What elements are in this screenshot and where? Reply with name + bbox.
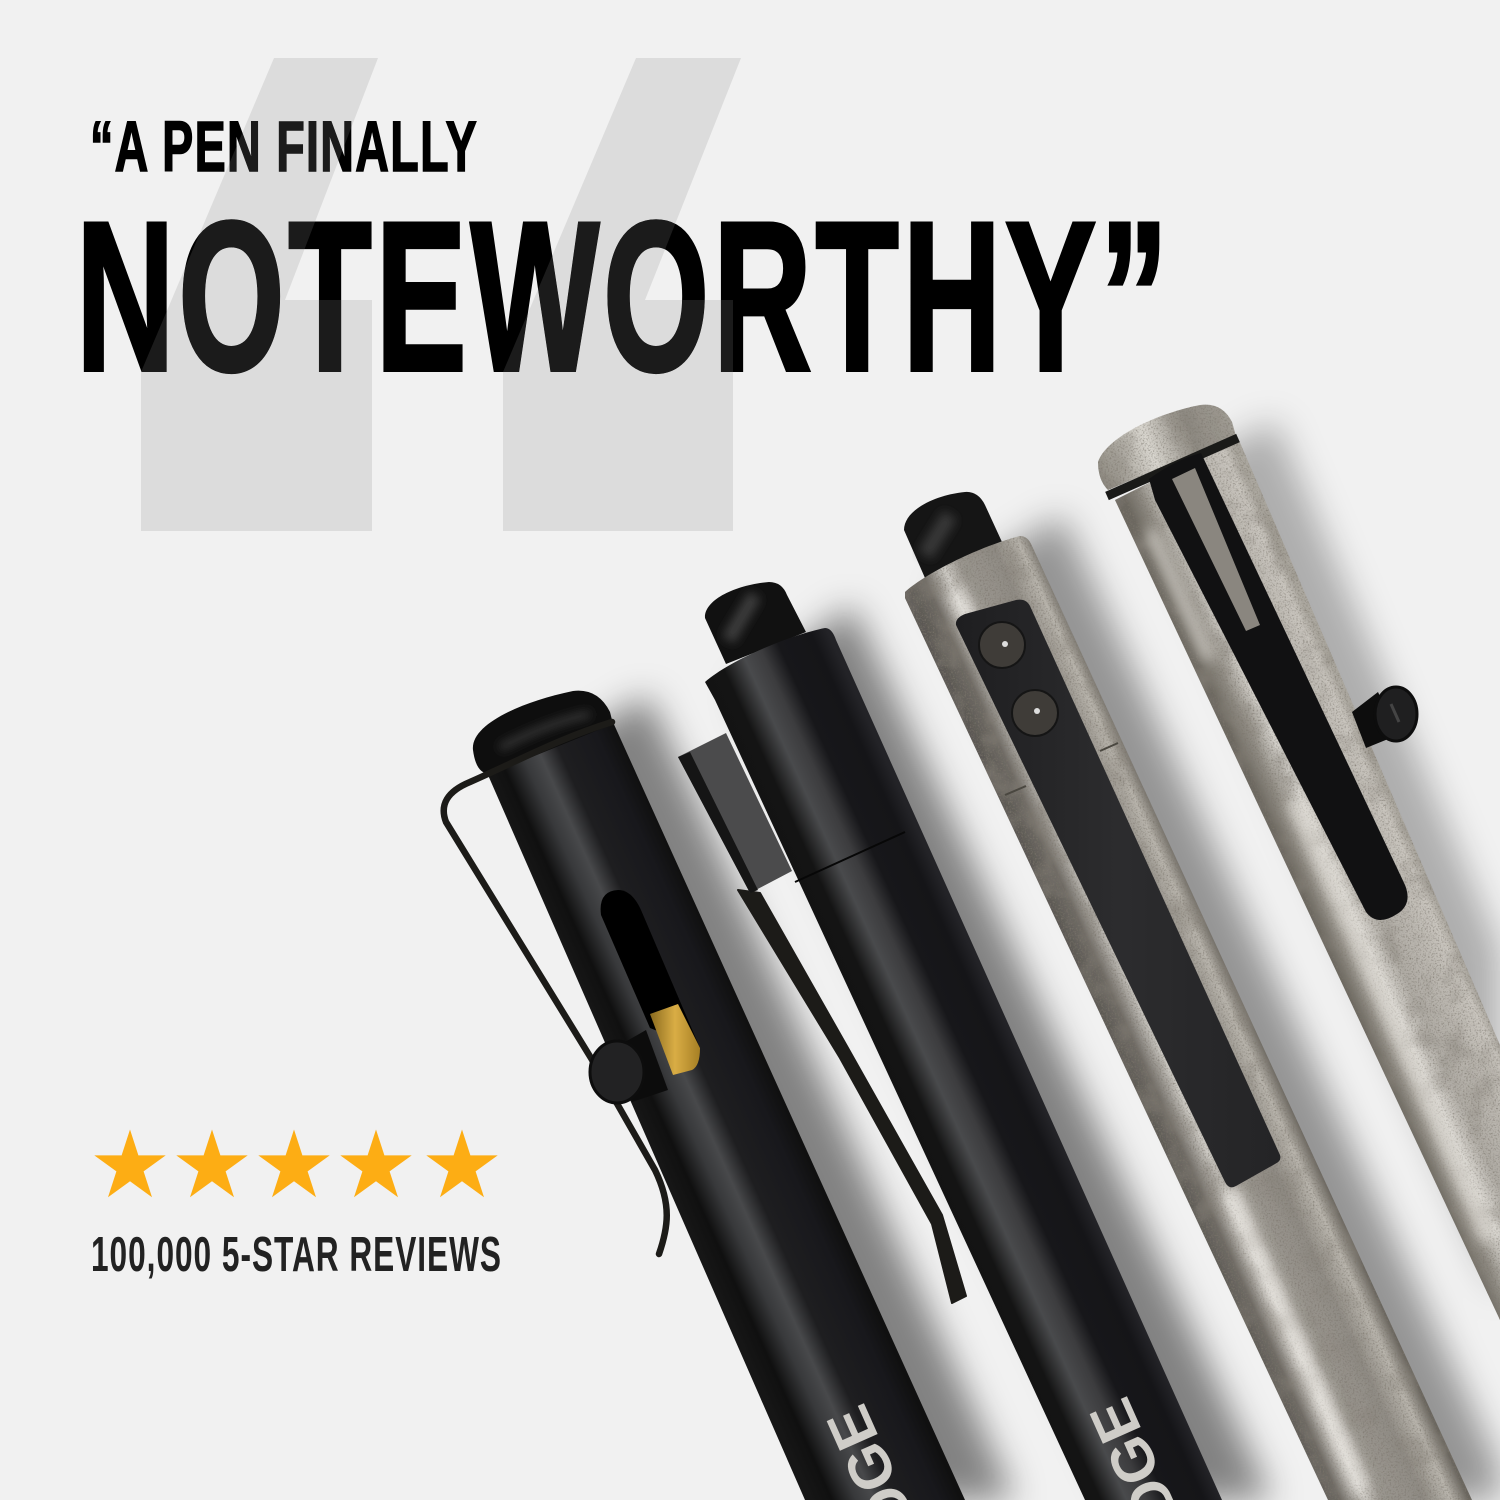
star 5 bbox=[426, 1130, 498, 1197]
pen 4 ring groove bbox=[1107, 438, 1238, 496]
quote line one: “A PEN FINALLY bbox=[90, 108, 478, 187]
pen 4 highlights bbox=[1150, 530, 1490, 1240]
review count: 100,000 5-STAR REVIEWS bbox=[91, 1228, 502, 1282]
pen 2 clip spring bbox=[738, 890, 966, 1303]
pen 3 screw top bbox=[979, 622, 1025, 668]
pen 2: black with block clip bbox=[678, 582, 1222, 1500]
pen 3 highlights bbox=[955, 590, 1362, 1490]
pen 2 clip block bbox=[678, 733, 792, 893]
star 3 bbox=[258, 1130, 330, 1197]
pen 3 push button bbox=[904, 492, 1002, 578]
pen 1 pin head bbox=[590, 1041, 644, 1103]
pen 3 flat clip plate bbox=[956, 600, 1280, 1187]
pen 1 body bbox=[488, 720, 965, 1500]
pen 1: black with slot bbox=[444, 691, 965, 1500]
pen 3 seam bbox=[1005, 743, 1118, 795]
star 2 bbox=[176, 1130, 248, 1197]
pen 3 screw bottom bbox=[1012, 690, 1058, 736]
pen 1 cap bbox=[473, 691, 613, 774]
pen 1 wire clip bbox=[444, 722, 667, 1254]
pen 1 brass insert bbox=[650, 1004, 700, 1075]
pen shadows bbox=[540, 420, 1500, 1500]
star 1 bbox=[94, 1130, 166, 1197]
headline bbox=[76, 108, 1172, 416]
rating stars bbox=[94, 1130, 498, 1197]
pen 4 clip cut-out bbox=[1172, 468, 1260, 631]
pen 1 slot bbox=[601, 890, 700, 1048]
quotation mark tint over headline bbox=[141, 58, 741, 531]
pen 4 knob bbox=[1352, 687, 1417, 748]
pen 3 body bbox=[905, 536, 1472, 1500]
pen 2 seam bbox=[795, 832, 905, 882]
pen 1 pin shaft bbox=[620, 1030, 668, 1102]
decorative quotation mark bbox=[141, 58, 741, 531]
pen 2 body bbox=[705, 628, 1222, 1500]
star 4 bbox=[340, 1130, 412, 1197]
pen 2 push button bbox=[705, 582, 806, 664]
pen 4 cap bbox=[1098, 405, 1236, 490]
pen 4 body bbox=[1115, 438, 1500, 1320]
pen 4 clip bbox=[1149, 453, 1408, 920]
pen 3: titanium with plate clip bbox=[904, 492, 1472, 1500]
pen 4: titanium with cut-out clip bbox=[1098, 405, 1500, 1320]
